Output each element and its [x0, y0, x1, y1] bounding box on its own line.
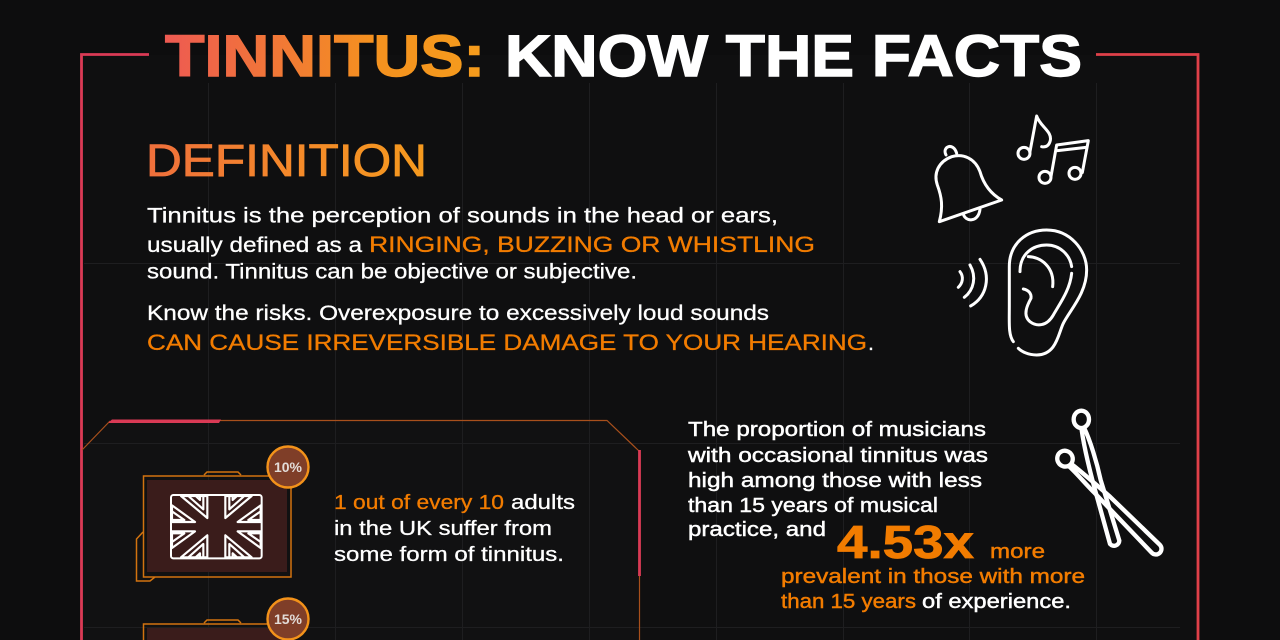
badge: 10%: 10%	[274, 459, 303, 475]
definition text block: Tinnitus is the perception of sounds in the head or ears,	[147, 204, 778, 228]
text: UK statistic: 1 out of every 10	[334, 491, 504, 514]
text: musicians statistic: more	[990, 541, 1045, 563]
icon: bell	[936, 146, 1002, 222]
badge: 15%	[268, 598, 308, 640]
icon: ear with sound waves	[958, 230, 1087, 355]
icon: music notes	[1018, 116, 1088, 183]
definition text block: Know the risks. Overexposure to excessively loud sounds	[147, 301, 769, 325]
icon: drumsticks	[1054, 411, 1161, 554]
definition text block: RINGING, BUZZING OR WHISTLING	[369, 232, 815, 257]
text: musicians statistic: The proportion of musicians	[688, 419, 986, 441]
heading: definition: DEFINITION	[146, 135, 427, 186]
text: musicians statistic: high among those with less	[688, 470, 982, 492]
title: TINNITUS:	[165, 24, 485, 89]
title: KNOW THE FACTS	[505, 24, 1082, 89]
text: musicians statistic: 4.53x	[837, 516, 974, 568]
badge: 15%: 15%	[274, 611, 303, 627]
definition text block: CAN CAUSE IRREVERSIBLE DAMAGE TO YOUR HEARING	[147, 330, 867, 355]
card: UK flag	[136, 446, 308, 581]
text: musicians statistic: than 15 years of musical	[688, 495, 938, 517]
panel: statistics frame	[82, 420, 640, 640]
icon: UK flag	[171, 495, 262, 558]
definition text block: sound. Tinnitus can be objective or subjective.	[147, 260, 637, 284]
definition text block	[147, 204, 874, 355]
text: musicians statistic: with occasional tinnitus was	[687, 445, 988, 467]
card: second statistic	[144, 598, 308, 640]
text: musicians statistic	[687, 419, 1085, 613]
text: UK statistic	[334, 491, 575, 566]
text: UK statistic: some form of tinnitus.	[334, 543, 564, 566]
text: UK statistic: adults	[511, 491, 575, 514]
text: musicians statistic: practice, and	[688, 519, 826, 541]
red outer frame	[82, 54, 1198, 640]
title	[165, 24, 1082, 89]
text: UK statistic: in the UK suffer from	[334, 517, 552, 540]
text: musicians statistic: than 15 years	[781, 591, 916, 613]
text: musicians statistic: of experience.	[922, 591, 1071, 613]
definition text block: usually defined as a	[147, 233, 362, 257]
text: musicians statistic: prevalent in those with more	[781, 566, 1085, 588]
definition text block: .	[868, 331, 874, 355]
badge: 10%	[268, 446, 308, 488]
